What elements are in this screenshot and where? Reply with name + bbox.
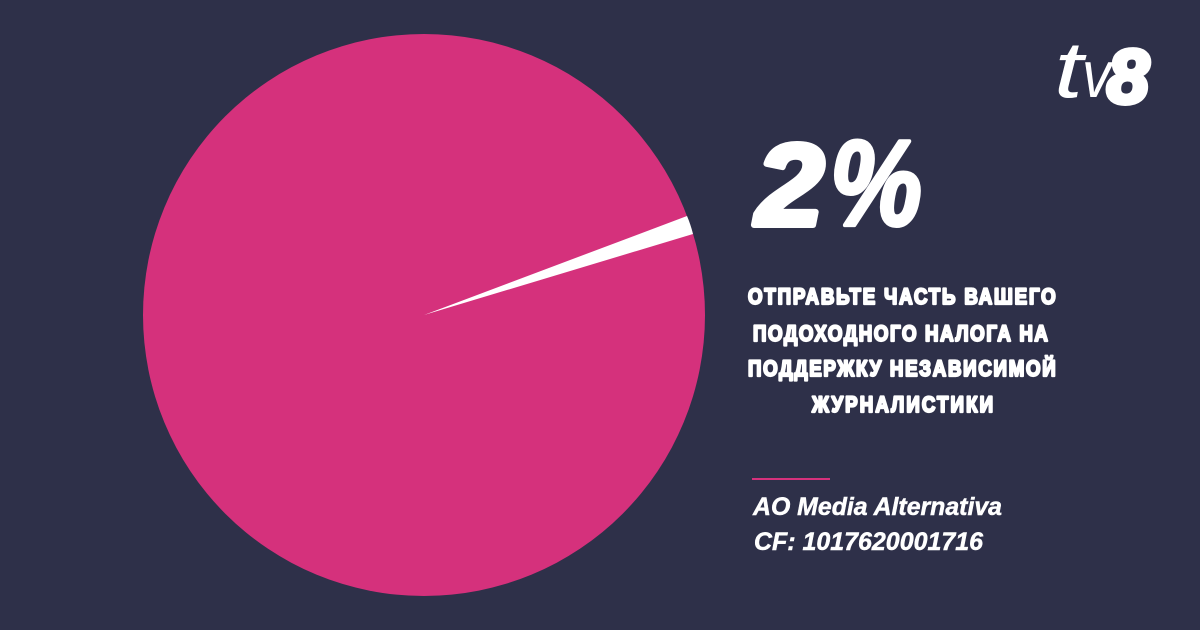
call to action text: ПОДДЕРЖКУ НЕЗАВИСИМОЙ bbox=[748, 356, 1056, 381]
call to action text: ЖУРНАЛИСТИКИ bbox=[811, 394, 993, 417]
organisation details bbox=[752, 493, 1002, 556]
big percentage: % bbox=[830, 115, 922, 251]
logo: tv8: 8 bbox=[1107, 35, 1150, 120]
pie slice: 2% wedge bbox=[424, 216, 693, 315]
big percentage bbox=[754, 115, 922, 251]
divider rule bbox=[752, 478, 830, 480]
organisation details: CF: 1017620001716 bbox=[754, 528, 984, 556]
logo: tv8 bbox=[1054, 25, 1150, 120]
organisation details: AO Media Alternativa bbox=[752, 493, 1002, 521]
call to action text: ОТПРАВЬТЕ ЧАСТЬ ВАШЕГО bbox=[748, 286, 1056, 309]
big percentage: 2 bbox=[754, 120, 824, 250]
call to action text: ПОДОХОДНОГО НАЛОГА НА bbox=[753, 323, 1048, 346]
logo: tv8: v bbox=[1082, 37, 1115, 111]
logo: tv8: t bbox=[1054, 25, 1087, 114]
pie chart bbox=[143, 34, 705, 596]
call to action text bbox=[748, 286, 1056, 417]
